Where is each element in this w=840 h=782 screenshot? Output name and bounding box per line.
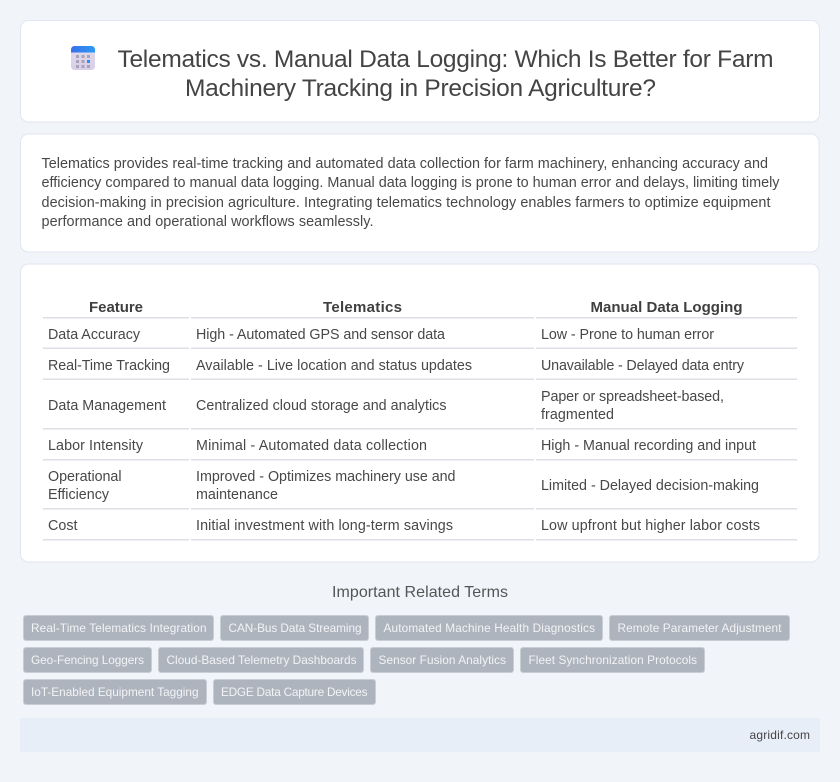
row: data accuracy: Data Accuracy	[48, 327, 141, 343]
row: data management: Centralized cloud storage and analytics	[196, 398, 446, 414]
row: real-time tracking: Available - Live location and status updates	[196, 358, 472, 374]
row: data management: Data Management	[48, 398, 166, 414]
tag group: related terms: EDGE Data Capture Devices	[221, 685, 368, 699]
row: cost: Initial investment with long-term savings	[196, 518, 453, 534]
row: real-time tracking: Real-Time Tracking	[48, 358, 170, 374]
title: Telematics vs. Manual Data Logging: Which Is Better for Farm	[118, 46, 774, 73]
tag group: related terms: IoT-Enabled Equipment Tagging	[31, 685, 198, 699]
row: operational efficiency: Efficiency	[48, 487, 110, 503]
table header: Telematics	[323, 299, 402, 316]
row: operational efficiency: maintenance	[196, 487, 278, 503]
row: real-time tracking	[48, 358, 745, 374]
footer: agridif.com	[750, 728, 810, 742]
row: real-time tracking: Unavailable - Delayed data entry	[541, 358, 745, 374]
tag group: related terms	[24, 616, 790, 704]
tag group: related terms: Real-Time Telematics Integration	[31, 621, 206, 635]
heading: important related terms: Important Related Terms	[332, 584, 508, 601]
title: Machinery Tracking in Precision Agriculture?	[185, 75, 656, 102]
tag group: related terms: Sensor Fusion Analytics	[378, 653, 506, 667]
table header	[89, 299, 742, 316]
tag group: related terms: Geo-Fencing Loggers	[31, 653, 144, 667]
row: cost: Cost	[48, 518, 78, 534]
row: data accuracy	[48, 327, 714, 343]
tag group: related terms: Cloud-Based Telemetry Dashboards	[166, 653, 357, 667]
row: cost: Low upfront but higher labor costs	[541, 518, 760, 534]
title	[118, 46, 774, 102]
icon: calendar	[71, 46, 95, 70]
footer	[20, 718, 820, 752]
row: data management: Paper or spreadsheet-based,	[541, 389, 724, 405]
intro paragraph: efficiency compared to manual data logging. Manual data logging is prone to human error and delays, limiting timely	[42, 175, 780, 191]
row: data accuracy: High - Automated GPS and sensor data	[196, 327, 445, 343]
row: labor intensity: High - Manual recording and input	[541, 438, 756, 454]
row: labor intensity: Minimal - Automated data collection	[196, 438, 427, 454]
panel: comparison table	[20, 264, 819, 562]
intro paragraph	[42, 156, 780, 230]
row: labor intensity: Labor Intensity	[48, 438, 144, 454]
tag group: related terms: Fleet Synchronization Protocols	[528, 653, 697, 667]
table header: Feature	[89, 299, 143, 316]
panel: intro text	[20, 134, 819, 252]
row: data management	[48, 389, 724, 423]
row: operational efficiency: Limited - Delayed decision-making	[541, 478, 759, 494]
row: cost	[48, 518, 760, 534]
table header: Manual Data Logging	[590, 299, 742, 316]
tag group: related terms: Remote Parameter Adjustment	[618, 621, 782, 635]
tag group: related terms: Automated Machine Health Diagnostics	[384, 621, 595, 635]
intro paragraph: Telematics provides real-time tracking and automated data collection for farm machinery, enhancing accuracy and	[42, 156, 768, 172]
panel: header	[20, 20, 820, 122]
tag group: related terms: CAN-Bus Data Streaming	[228, 621, 362, 635]
intro paragraph: decision-making in precision agriculture. Integrating telematics technology enables farmers to optimize equipment	[42, 195, 770, 211]
row: operational efficiency: Operational	[48, 469, 122, 485]
row: labor intensity	[48, 438, 756, 454]
intro paragraph: performance and operational workflows seamlessly.	[42, 214, 374, 230]
row: operational efficiency	[48, 469, 759, 503]
row: data management: fragmented	[541, 407, 614, 423]
row: data accuracy: Low - Prone to human error	[541, 327, 714, 343]
row: operational efficiency: Improved - Optimizes machinery use and	[196, 469, 456, 485]
